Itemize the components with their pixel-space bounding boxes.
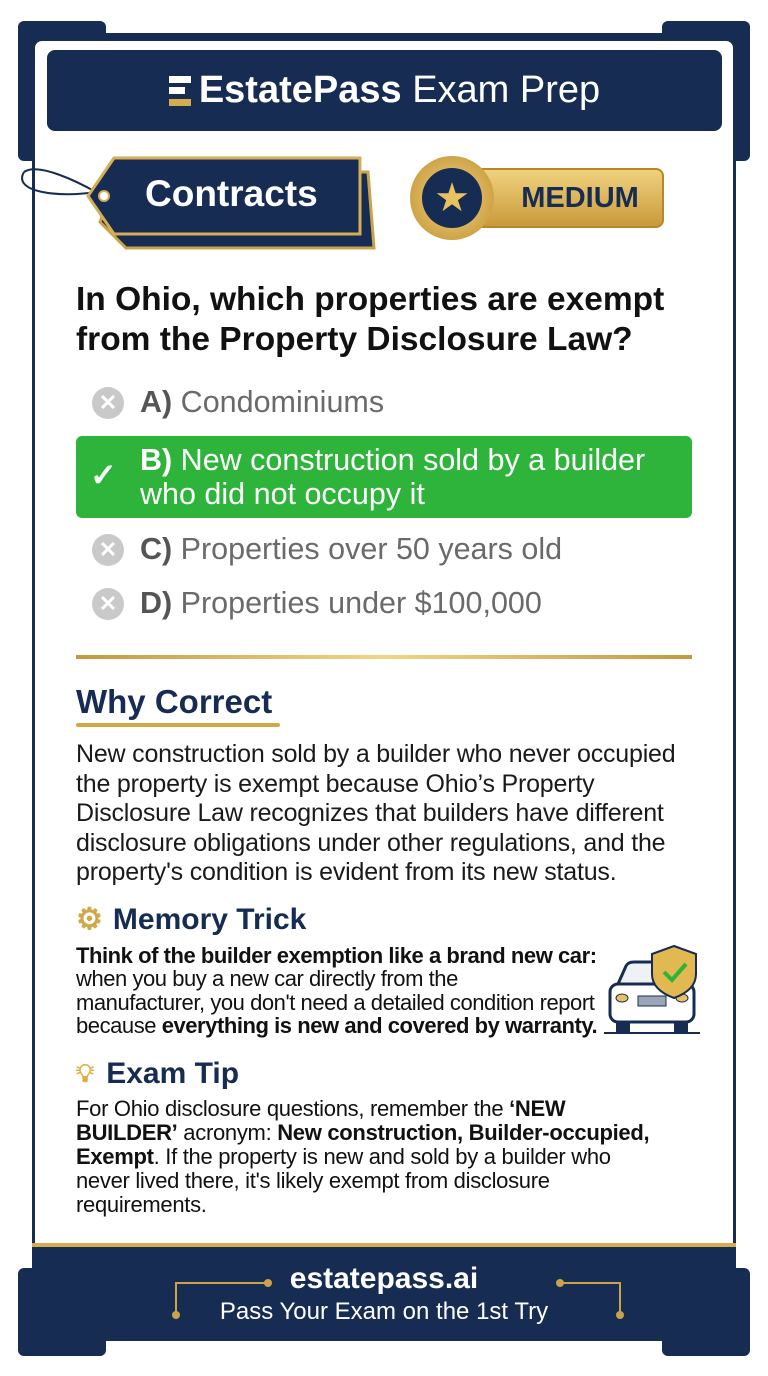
badge: MEDIUM <box>410 156 664 240</box>
question: In Ohio, which properties are exempt <box>76 281 664 318</box>
icon: gear: ⚙ <box>76 903 103 936</box>
header bar <box>47 50 722 131</box>
why correct text: Disclosure Law recognizes that builders have different <box>76 799 664 827</box>
question <box>76 281 664 358</box>
option A: A) <box>140 385 172 419</box>
icon: logo <box>169 76 191 106</box>
exam tip text <box>76 1096 649 1217</box>
option D: ✕ <box>99 590 117 616</box>
option D: Properties under $100,000 <box>181 586 542 620</box>
exam tip text: Exempt. If the property is new and sold by a builder who <box>76 1144 611 1169</box>
tag: Contracts: Contracts <box>145 173 318 214</box>
why correct text: disclosure obligations under other regulations, and the <box>76 828 665 856</box>
footer tagline: Pass Your Exam on the 1st Try <box>220 1298 548 1325</box>
question: from the Property Disclosure Law? <box>76 321 633 358</box>
memory trick text: Think of the builder exemption like a brand new car: <box>76 943 597 968</box>
option B correct: ✓ <box>90 457 117 493</box>
option B correct: B) New construction sold by a builder <box>140 443 645 477</box>
option A: Condominiums <box>181 385 384 419</box>
heading: Exam Tip: Exam Tip <box>106 1057 239 1090</box>
option D: D) <box>140 586 172 620</box>
header title: EstatePass Exam Prep <box>199 69 600 111</box>
exam tip text: BUILDER’ acronym: New construction, Builder-occupied, <box>76 1120 649 1145</box>
heading: Why Correct: Why Correct <box>76 683 272 720</box>
tag: Contracts <box>21 156 376 250</box>
option B correct: who did not occupy it <box>140 477 425 511</box>
memory trick text: when you buy a new car directly from the <box>76 966 458 991</box>
exam tip text: requirements. <box>76 1192 207 1217</box>
badge: MEDIUM: ★ <box>434 176 470 220</box>
footer site: estatepass.ai <box>290 1262 478 1295</box>
memory trick text: because everything is new and covered by warranty. <box>76 1013 597 1038</box>
badge: MEDIUM: MEDIUM <box>521 182 639 214</box>
why correct text: the property is exempt because Ohio’s Property <box>76 770 594 798</box>
option A <box>92 385 384 419</box>
footer <box>32 1243 736 1341</box>
why correct text: property's condition is evident from its new status. <box>76 858 616 886</box>
icon: bulb: 💡︎ <box>76 1058 94 1088</box>
icon: car with shield <box>604 944 700 1034</box>
memory trick text <box>76 943 597 1038</box>
heading: Memory Trick: Memory Trick <box>113 902 306 936</box>
option B correct <box>76 436 692 518</box>
option A: ✕ <box>99 390 117 414</box>
option C: C) <box>140 532 172 566</box>
memory trick text: manufacturer, you don't need a detailed condition report <box>76 990 594 1015</box>
exam tip text: For Ohio disclosure questions, remember the ‘NEW <box>76 1096 565 1121</box>
option C: Properties over 50 years old <box>181 532 562 566</box>
why correct text: New construction sold by a builder who never occupied <box>76 740 675 768</box>
exam tip text: never lived there, it's likely exempt from disclosure <box>76 1168 550 1193</box>
option C: ✕ <box>99 536 117 562</box>
why correct text <box>76 740 675 886</box>
